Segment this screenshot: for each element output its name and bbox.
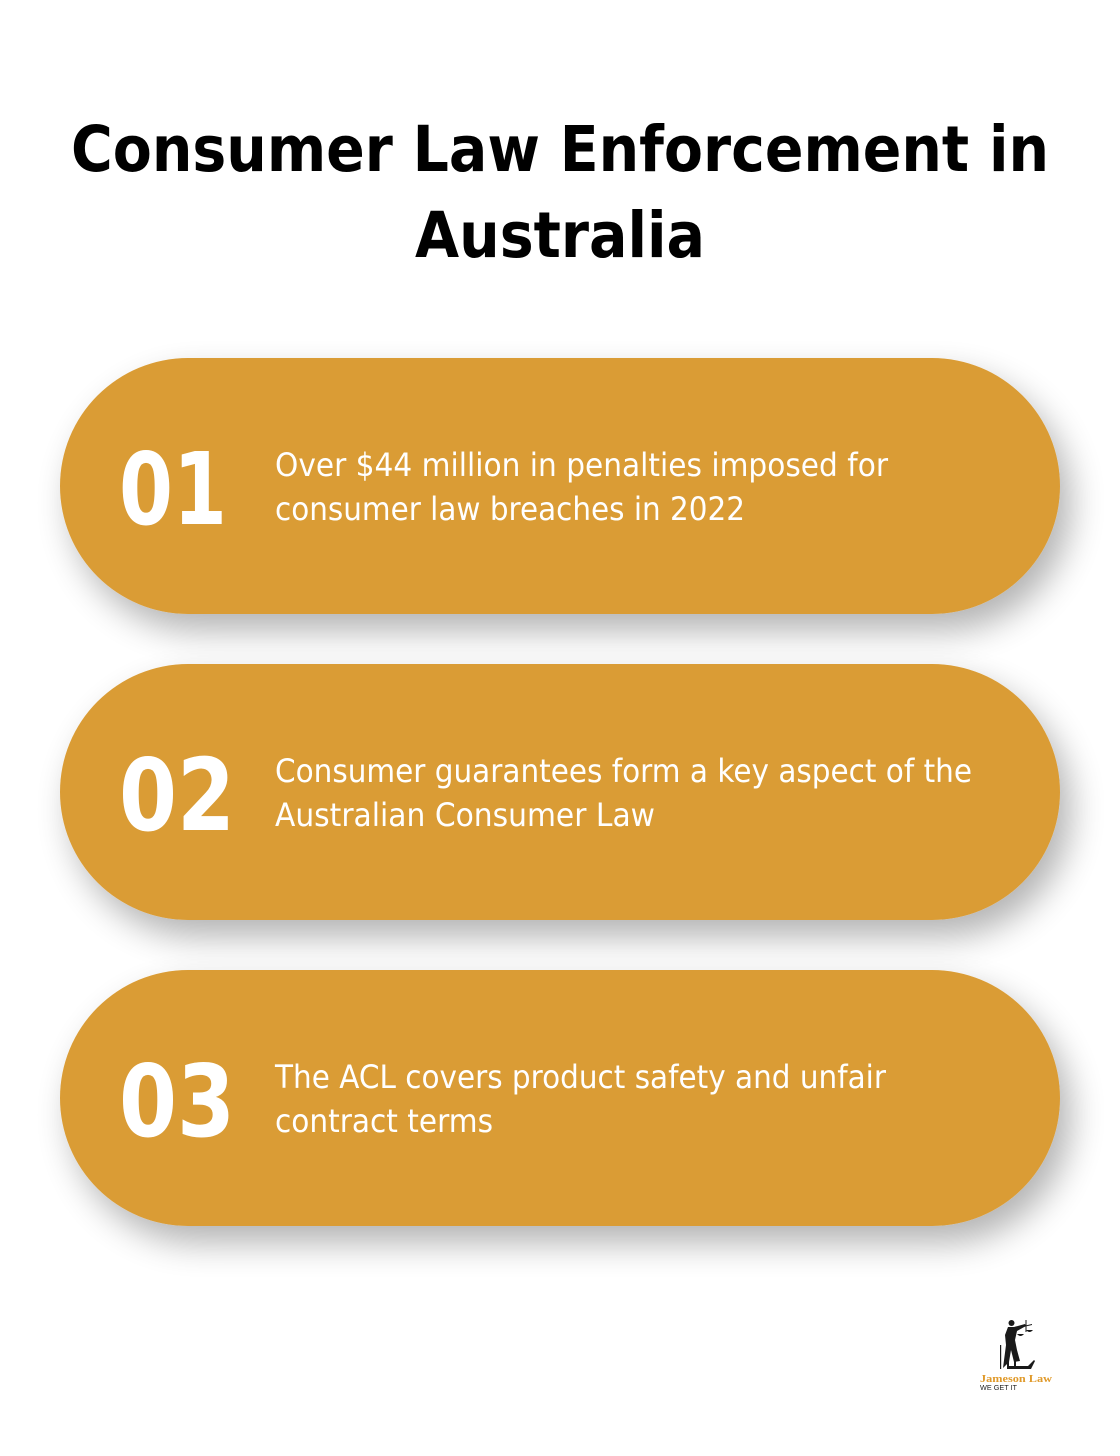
- logo: Jameson Law: [980, 1320, 1052, 1392]
- number 03: 03: [119, 1043, 235, 1160]
- icon: lady justice: [1000, 1320, 1035, 1369]
- title: Australia: [415, 199, 705, 272]
- text block: card 01: consumer law breaches in 2022: [275, 490, 745, 528]
- number 01: 01: [119, 431, 227, 548]
- number 02: 02: [119, 737, 235, 854]
- text block: card 03: The ACL covers product safety and unfair: [274, 1058, 887, 1096]
- text block: card 02: Australian Consumer Law: [275, 796, 655, 834]
- text block: card 01: [275, 446, 889, 528]
- text block: card 03: contract terms: [275, 1102, 493, 1140]
- logo tagline: WE GET IT: [980, 1385, 1018, 1392]
- title: [71, 113, 1049, 272]
- text block: card 01: Over $44 million in penalties imposed for: [275, 446, 889, 484]
- text block: card 02: [275, 752, 972, 834]
- panel: card 03: [60, 970, 1060, 1226]
- panel: card 01: [60, 358, 1060, 614]
- text block: card 03: [274, 1058, 887, 1140]
- text block: card 02: Consumer guarantees form a key aspect of the: [275, 752, 972, 790]
- logo name: Jameson Law: [980, 1374, 1052, 1385]
- panel: card 02: [60, 664, 1060, 920]
